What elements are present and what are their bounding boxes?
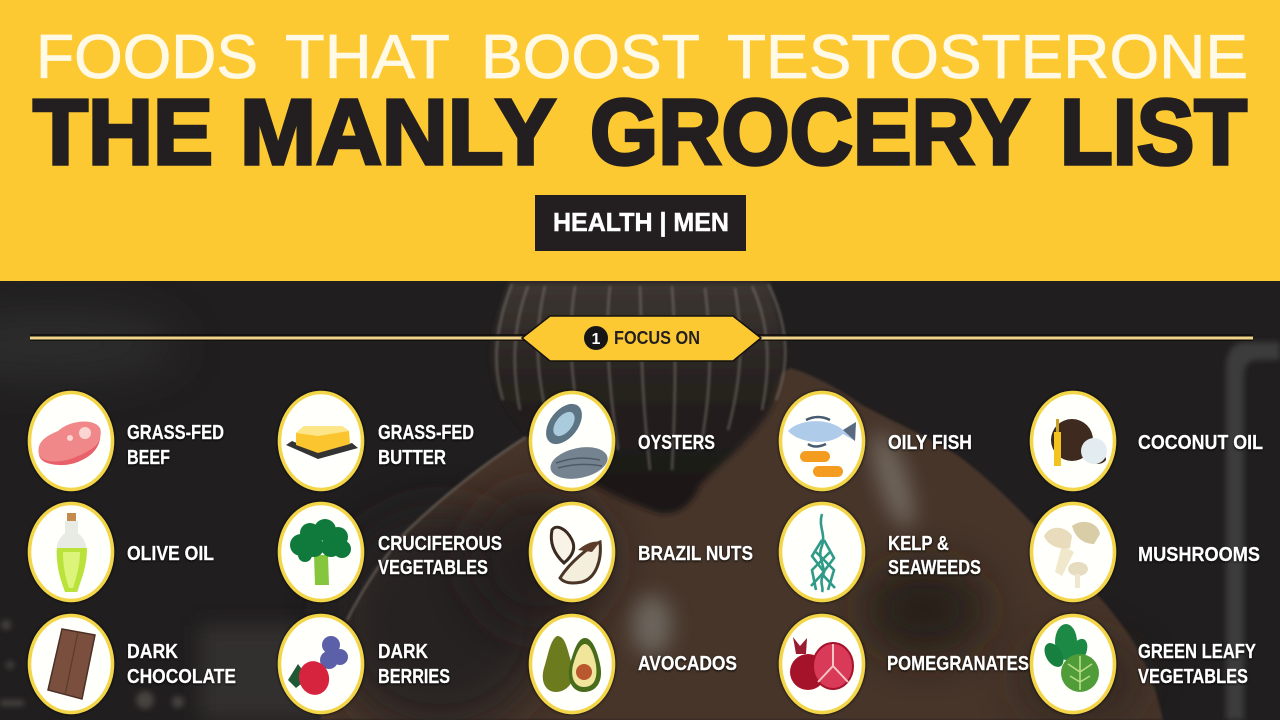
label: OYSTERS [638,431,715,454]
icon: mushrooms [1032,504,1114,600]
icon: broccoli [280,504,362,600]
label [378,532,502,579]
label: CRUCIFEROUS [378,532,502,555]
item: mushrooms [1032,504,1260,600]
label: GRASS-FED [378,421,474,444]
title: the manly grocery list: LIST [1060,80,1247,184]
item: coconut oil [1032,392,1263,490]
icon: avocados [530,616,614,712]
title: foods that boost testosterone: BOOST [481,23,700,92]
category tag: health | men: HEALTH | MEN [553,207,729,237]
icon: brazil nuts [530,504,614,600]
label [127,640,236,688]
icon: beef [30,392,112,490]
item: oysters [530,392,715,490]
label: BUTTER [378,446,446,469]
title: foods that boost testosterone: FOODS [36,23,258,92]
item: grass-fed butter [280,392,474,490]
icon: chocolate bar [30,616,112,712]
item: olive oil [30,504,214,600]
label: GRASS-FED [127,421,224,444]
title: the manly grocery list: MANLY [240,80,556,184]
icon: fish and capsules [780,392,864,490]
label: AVOCADOS [638,652,737,675]
label: OILY FISH [888,431,972,454]
icon: olive oil bottle [30,504,112,600]
label: GREEN LEAFY [1138,640,1256,663]
label: VEGETABLES [378,556,488,579]
item: pomegranates [780,616,1029,712]
yellow header band [0,0,1280,281]
label: KELP & [888,532,949,555]
dark gym photo background [0,280,1280,720]
label: MUSHROOMS [1138,543,1260,566]
item: avocados [530,616,737,712]
label [127,421,224,469]
icon: leafy greens [1032,616,1114,712]
item: oily fish [780,392,972,490]
icon: pomegranate [780,616,864,712]
label: BRAZIL NUTS [638,542,753,565]
section banner: focus on: FOCUS ON [614,328,700,348]
label [378,421,474,469]
title: the manly grocery list [33,80,1247,184]
item: kelp and seaweeds [780,504,981,600]
label: POMEGRANATES [887,652,1029,675]
section banner: focus on [30,316,1253,361]
label: SEAWEEDS [888,556,981,579]
item: dark berries [280,616,450,712]
label: OLIVE OIL [127,542,214,565]
label: CHOCOLATE [127,665,236,688]
label: DARK [127,640,178,663]
icon: coconut and oil [1032,392,1114,490]
title: the manly grocery list: THE [33,80,213,184]
icon: berries [280,616,362,712]
label [888,532,981,579]
item: cruciferous vegetables [280,504,502,600]
label [1138,640,1256,688]
label: COCONUT OIL [1138,431,1263,454]
item: grass-fed beef [30,392,224,490]
icon: butter [280,392,362,490]
item: dark chocolate [30,616,236,712]
label: VEGETABLES [1138,665,1248,688]
section banner: focus on: 1 [592,331,601,348]
item: brazil nuts [530,504,753,600]
title: the manly grocery list: GROCERY [590,80,1030,184]
label: BEEF [127,446,170,469]
man's torso [320,368,1163,720]
title: foods that boost testosterone: TESTOSTERONE [727,23,1248,92]
label: DARK [378,640,428,663]
label: BERRIES [378,665,450,688]
icon: kelp [780,504,864,600]
category tag: health | men [535,195,746,251]
item: green leafy vegetables [1032,616,1256,712]
label [378,640,450,688]
title: foods that boost testosterone [36,23,1248,92]
man's hair [492,282,785,513]
icon: oysters [530,392,614,490]
title: foods that boost testosterone: THAT [285,23,450,92]
